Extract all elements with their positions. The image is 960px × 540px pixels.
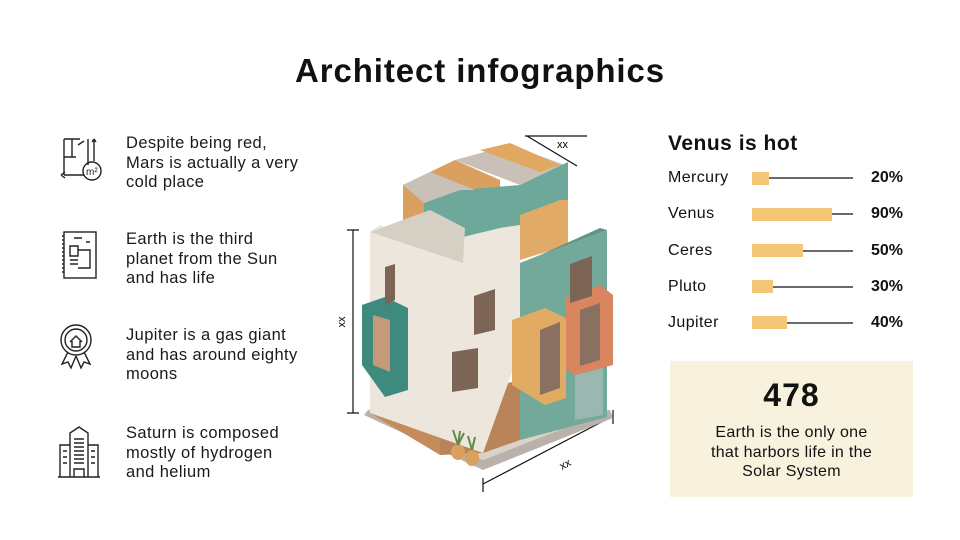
stat text: Earth is the only one <box>715 424 868 441</box>
text 2: planet from the Sun <box>126 250 278 268</box>
text 2 <box>126 230 278 287</box>
top small orange <box>520 200 568 260</box>
bar rows: 40% <box>871 314 903 331</box>
text 4: mostly of hydrogen <box>126 444 273 462</box>
icon: award badge <box>60 324 92 370</box>
left teal frame <box>362 297 408 397</box>
text 4 <box>126 424 279 481</box>
icon: floor plan m2 <box>60 138 102 181</box>
text 4: Saturn is composed <box>126 424 279 442</box>
text 1: Despite being red, <box>126 134 267 152</box>
icon: blueprint notebook <box>62 231 97 279</box>
text 2: Earth is the third <box>126 230 253 248</box>
callout: 478 stat <box>670 361 913 497</box>
cream main block <box>370 225 520 453</box>
feature list <box>58 134 298 481</box>
bar rows <box>668 169 903 331</box>
text 2: and has life <box>126 269 215 287</box>
item 2 <box>62 230 278 287</box>
bar rows: Jupiter <box>668 314 719 331</box>
top teal box <box>424 162 568 262</box>
bar rows: 30% <box>871 278 903 295</box>
text 3 <box>126 326 298 383</box>
chart title: Venus is hot <box>668 132 798 155</box>
chart: Venus is hot <box>668 132 903 331</box>
orange bay <box>512 308 566 405</box>
illustration: isometric building: xx <box>557 139 568 151</box>
bar rows: 50% <box>871 242 903 259</box>
text 3: Jupiter is a gas giant <box>126 326 286 344</box>
dimension lines <box>347 136 613 492</box>
text 1 <box>126 134 298 191</box>
stat text: that harbors life in the <box>711 444 872 460</box>
top orange box <box>403 160 500 245</box>
base <box>364 410 613 470</box>
text 4: and helium <box>126 463 211 481</box>
icon: tower building <box>58 426 100 478</box>
item 1 <box>60 134 298 191</box>
text 3: and has around eighty <box>126 346 298 364</box>
bar rows: Venus <box>668 205 714 222</box>
wooden ground floor <box>370 370 440 455</box>
bar rows: 90% <box>871 205 903 222</box>
text 1: Mars is actually a very <box>126 154 298 172</box>
bar rows: Ceres <box>668 242 713 259</box>
stat number: 478 <box>763 377 820 413</box>
plants <box>451 444 465 460</box>
illustration: isometric building: xx <box>336 316 348 328</box>
bar rows: Mercury <box>668 169 729 186</box>
item 3 <box>60 324 298 383</box>
text 1: cold place <box>126 173 204 191</box>
illustration: isometric building <box>336 135 614 492</box>
title: Architect infographics <box>295 52 665 89</box>
right teal block <box>520 230 607 440</box>
icon: floor plan m2: m² <box>86 167 98 178</box>
stat text <box>711 424 872 480</box>
text 3: moons <box>126 365 178 383</box>
illustration: isometric building: xx <box>558 457 574 473</box>
windows <box>474 289 495 335</box>
stat text: Solar System <box>742 463 841 480</box>
bar rows: Pluto <box>668 278 706 295</box>
terracotta bay <box>566 285 613 375</box>
bar rows: 20% <box>871 169 903 186</box>
item 4 <box>58 424 279 481</box>
